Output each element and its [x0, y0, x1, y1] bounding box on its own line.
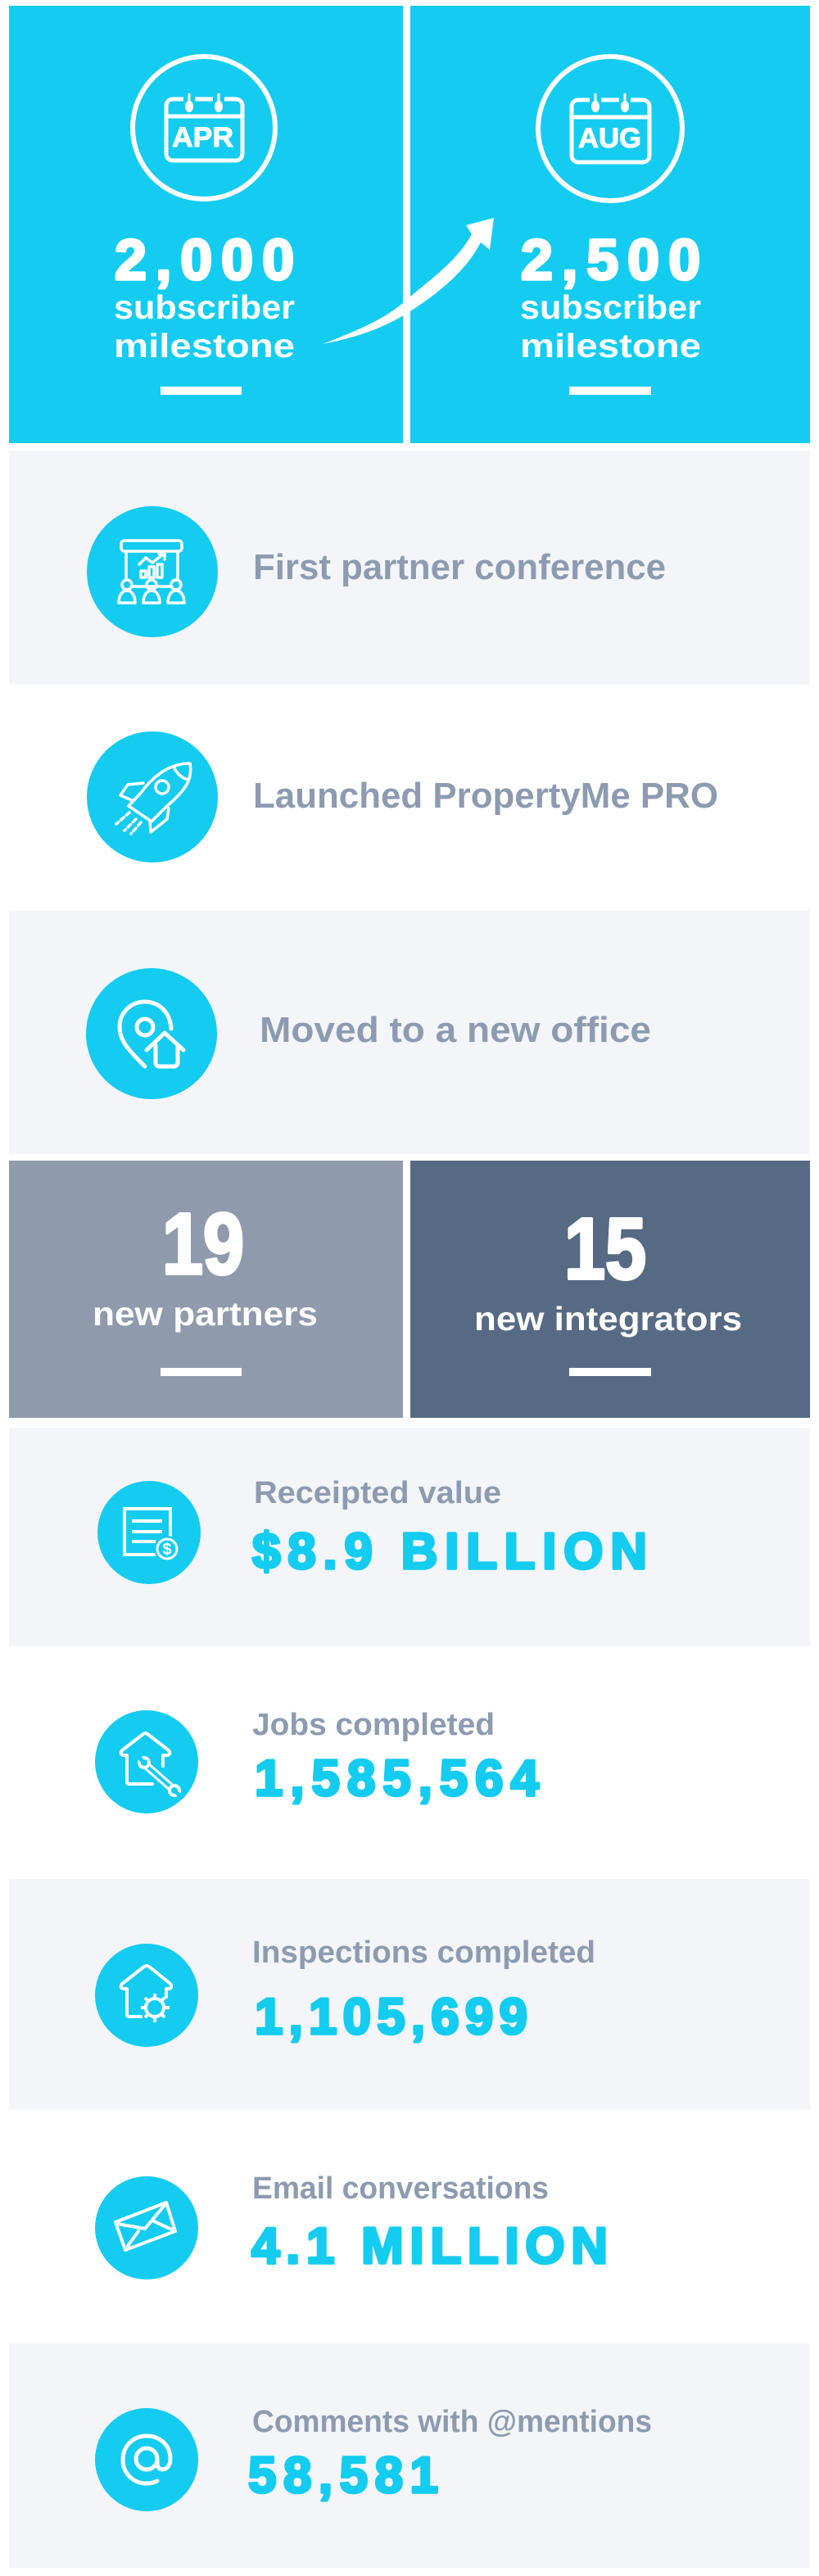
icon: rocket — [116, 763, 191, 834]
text: Launched PropertyMe PRO: Launched PropertyMe PRO — [253, 776, 718, 816]
text: subscriber milestone — [520, 288, 701, 364]
value: $8.9 billion: $8.9 BILLION — [252, 1523, 647, 1580]
number: 2,500: 2,500 — [521, 228, 700, 292]
number: 2,000: 2,000 — [115, 228, 294, 292]
panel: Launched PropertyMe PRO — [87, 731, 718, 862]
text: Comments with @mentions: Comments with @mentions — [252, 2405, 652, 2439]
icon: receipt with dollar coin: $ — [162, 1541, 172, 1559]
icon: house with gear — [121, 1966, 171, 2022]
text: Email conversations: Email conversations — [252, 2171, 549, 2206]
icon: August calendar: AUG — [578, 123, 641, 154]
text: Receipted value: Receipted value — [254, 1476, 501, 1510]
icon: house with wrench — [121, 1733, 181, 1797]
value: 4.1 million: 4.1 MILLION — [251, 2218, 608, 2275]
panel: Email conversations — [95, 2171, 608, 2279]
panel: Comments with @mentions — [9, 2343, 810, 2568]
number: 15: 15 — [564, 1201, 646, 1297]
icon: April calendar: APR — [172, 122, 233, 153]
panel: new integrators — [410, 1161, 810, 1418]
text: new partners: new partners — [93, 1295, 318, 1333]
text: subscriber milestone: milestone — [520, 327, 701, 364]
panel: First partner conference — [9, 450, 810, 685]
arrow: growth curve — [323, 218, 494, 344]
number: 19: 19 — [162, 1196, 244, 1293]
icon: April calendar — [133, 57, 275, 199]
value: 1,585,564: 1,585,564 — [255, 1750, 540, 1807]
value: 1,105,699: 1,105,699 — [255, 1989, 527, 2045]
text: Moved to a new office: Moved to a new office — [260, 1010, 651, 1050]
text: Jobs completed: Jobs completed — [252, 1708, 495, 1742]
panel: April milestone — [9, 6, 403, 443]
panel: Receipted value — [9, 1428, 810, 1646]
text: subscriber milestone — [114, 288, 295, 364]
icon: location pin with house — [120, 1002, 183, 1066]
panel: Jobs completed — [95, 1708, 540, 1813]
panel: new partners — [9, 1161, 403, 1418]
icon: envelope — [115, 2203, 175, 2250]
text: First partner conference: First partner conference — [253, 547, 666, 587]
value: 58,581: 58,581 — [248, 2447, 438, 2504]
icon: receipt with dollar coin — [124, 1509, 180, 1562]
text: subscriber milestone: subscriber — [114, 288, 295, 326]
text: Inspections completed: Inspections completed — [252, 1935, 595, 1970]
icon: presentation audience — [119, 541, 184, 603]
panel: Inspections completed — [9, 1879, 810, 2110]
text: subscriber milestone: milestone — [114, 327, 295, 364]
icon: August calendar — [538, 57, 682, 201]
text: new integrators: new integrators — [474, 1300, 742, 1338]
text: subscriber milestone: subscriber — [520, 288, 701, 326]
panel: August milestone — [410, 6, 810, 443]
icon: at sign — [123, 2436, 170, 2483]
panel: Moved to a new office — [9, 911, 810, 1154]
